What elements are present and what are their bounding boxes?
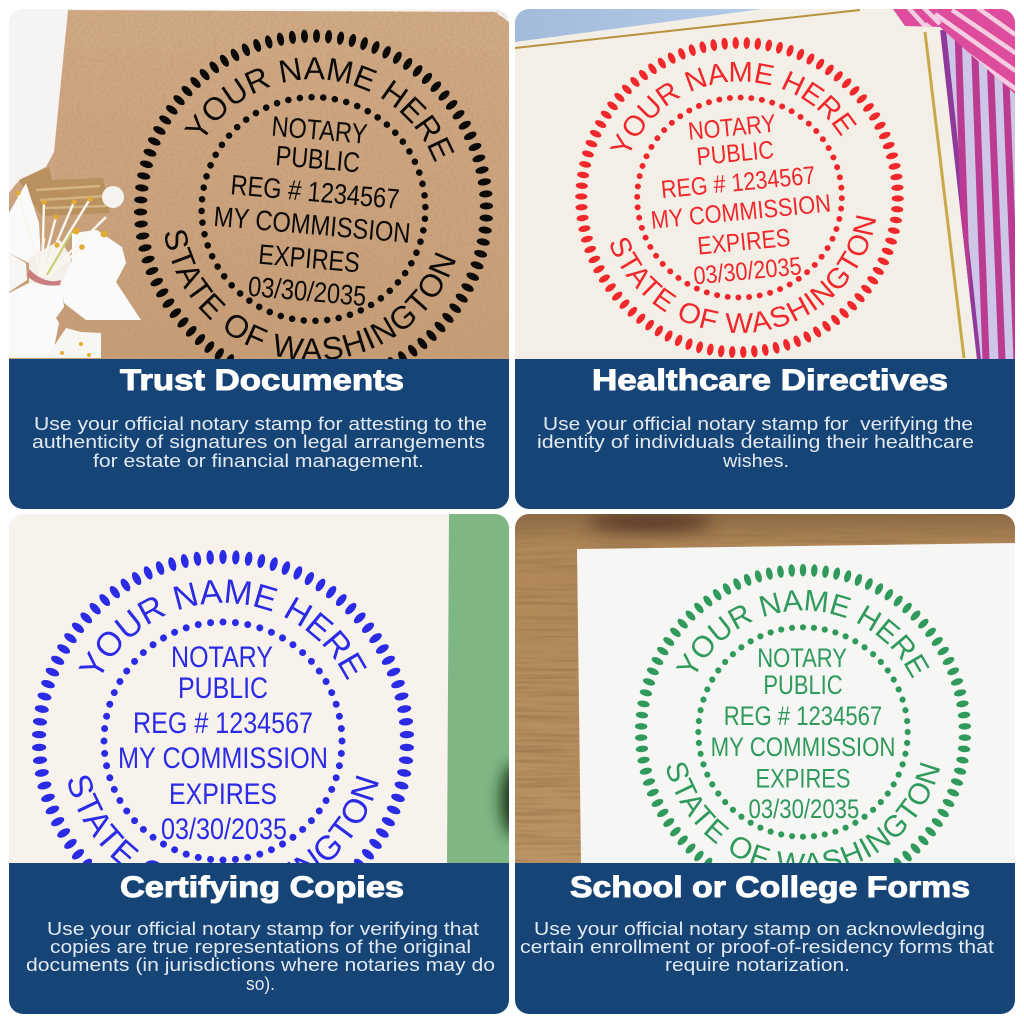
panel: Trust Documents (9, 9, 509, 509)
panel: Certifying Copies (9, 514, 509, 1014)
photo: cream card with striped ribbon (515, 4, 1020, 365)
stamp: blue Washington notary seal: YOUR NAME HERE (78, 579, 367, 680)
stamp: green Washington notary seal: MY COMMISSION (711, 732, 895, 762)
stamp: black Washington notary seal: REG # 1234567 (229, 168, 401, 215)
description: certain enrollment or proof-of-residency forms that (520, 937, 994, 957)
stamp: red Washington notary seal: STATE OF WASHINGTON (610, 215, 876, 333)
description: for estate or financial management. (93, 451, 424, 471)
photo: kraft paper with white blossom (9, 9, 509, 360)
stamp: blue Washington notary seal (32, 550, 414, 863)
stamp: blue Washington notary seal: STATE OF WASHINGTON (68, 776, 379, 863)
description: documents (in jurisdictions where notaries may do (26, 955, 495, 975)
description: wishes. (722, 451, 789, 471)
stamp: blue Washington notary seal: REG # 1234567 (133, 707, 313, 740)
panel: Healthcare Directives (515, 9, 1015, 509)
stamp: red Washington notary seal: NOTARY (687, 110, 777, 146)
stamp: blue Washington notary seal: MY COMMISSION (118, 742, 328, 775)
stamp: green Washington notary seal: 03/30/2035 (748, 794, 859, 824)
stamp: black Washington notary seal: MY COMMISSION (212, 200, 412, 249)
heading: Trust Documents (120, 364, 404, 397)
description (520, 919, 994, 975)
description: Use your official notary stamp for verifying that (47, 919, 479, 939)
stamp: green Washington notary seal: EXPIRES (755, 763, 851, 793)
stamp: red Washington notary seal: MY COMMISSION (650, 190, 832, 235)
stamp: black Washington notary seal: STATE OF WASHINGTON (165, 230, 456, 359)
caption band (515, 359, 1015, 509)
caption band (9, 863, 509, 1014)
stamp: green Washington notary seal: NOTARY (757, 643, 847, 673)
stamp: blue Washington notary seal: NOTARY (171, 641, 273, 674)
stamp: red Washington notary seal: 03/30/2035 (692, 253, 803, 290)
stamp: black Washington notary seal: NOTARY (270, 110, 369, 150)
stamp: black Washington notary seal: YOUR NAME HERE (184, 57, 454, 162)
description (32, 414, 487, 471)
caption band (515, 863, 1015, 1014)
stamp: black Washington notary seal (134, 29, 494, 359)
stamp: green Washington notary seal: YOUR NAME HERE (676, 590, 930, 678)
stamp: red Washington notary seal: YOUR NAME HERE (610, 62, 857, 150)
stamp: red Washington notary seal: REG # 1234567 (660, 162, 816, 204)
heading: School or College Forms (570, 871, 970, 904)
stamp: green Washington notary seal: REG # 1234567 (724, 701, 882, 731)
description (538, 416, 974, 467)
stamp: blue Washington notary seal: PUBLIC (178, 672, 268, 705)
stamp: black Washington notary seal: 03/30/2035 (247, 270, 368, 312)
heading: Certifying Copies (120, 871, 404, 904)
photo: white paper on wood desk (515, 512, 1015, 864)
description: require notarization. (665, 955, 850, 975)
stamp: red Washington notary seal (575, 37, 904, 358)
description (26, 919, 495, 994)
description: Use your official notary stamp for verifying the (543, 414, 973, 434)
heading: Healthcare Directives (592, 364, 948, 397)
description: identity of individuals detailing their healthcare (537, 432, 974, 452)
description: Use your official notary stamp on acknowledging (534, 919, 985, 939)
description: authenticity of signatures on legal arrangements (32, 432, 485, 452)
stamp: green Washington notary seal (634, 564, 972, 863)
stamp: red Washington notary seal: EXPIRES (696, 224, 791, 261)
panel: School or College Forms (515, 514, 1015, 1014)
stamp: black Washington notary seal: PUBLIC (274, 139, 361, 178)
stamp: green Washington notary seal: STATE OF WASHINGTON (666, 762, 940, 863)
stamp: blue Washington notary seal: 03/30/2035 (161, 813, 287, 846)
stamp: green Washington notary seal: PUBLIC (763, 670, 843, 700)
caption band (9, 359, 509, 509)
stamp: red Washington notary seal: PUBLIC (695, 136, 775, 171)
stamp: blue Washington notary seal: EXPIRES (169, 778, 277, 811)
stamp: black Washington notary seal: EXPIRES (257, 238, 361, 278)
description: copies are true representations of the original (50, 937, 471, 957)
photo: off-white paper and green card (9, 514, 530, 864)
description: so). (246, 974, 275, 994)
description: Use your official notary stamp for attesting to the (34, 414, 487, 434)
